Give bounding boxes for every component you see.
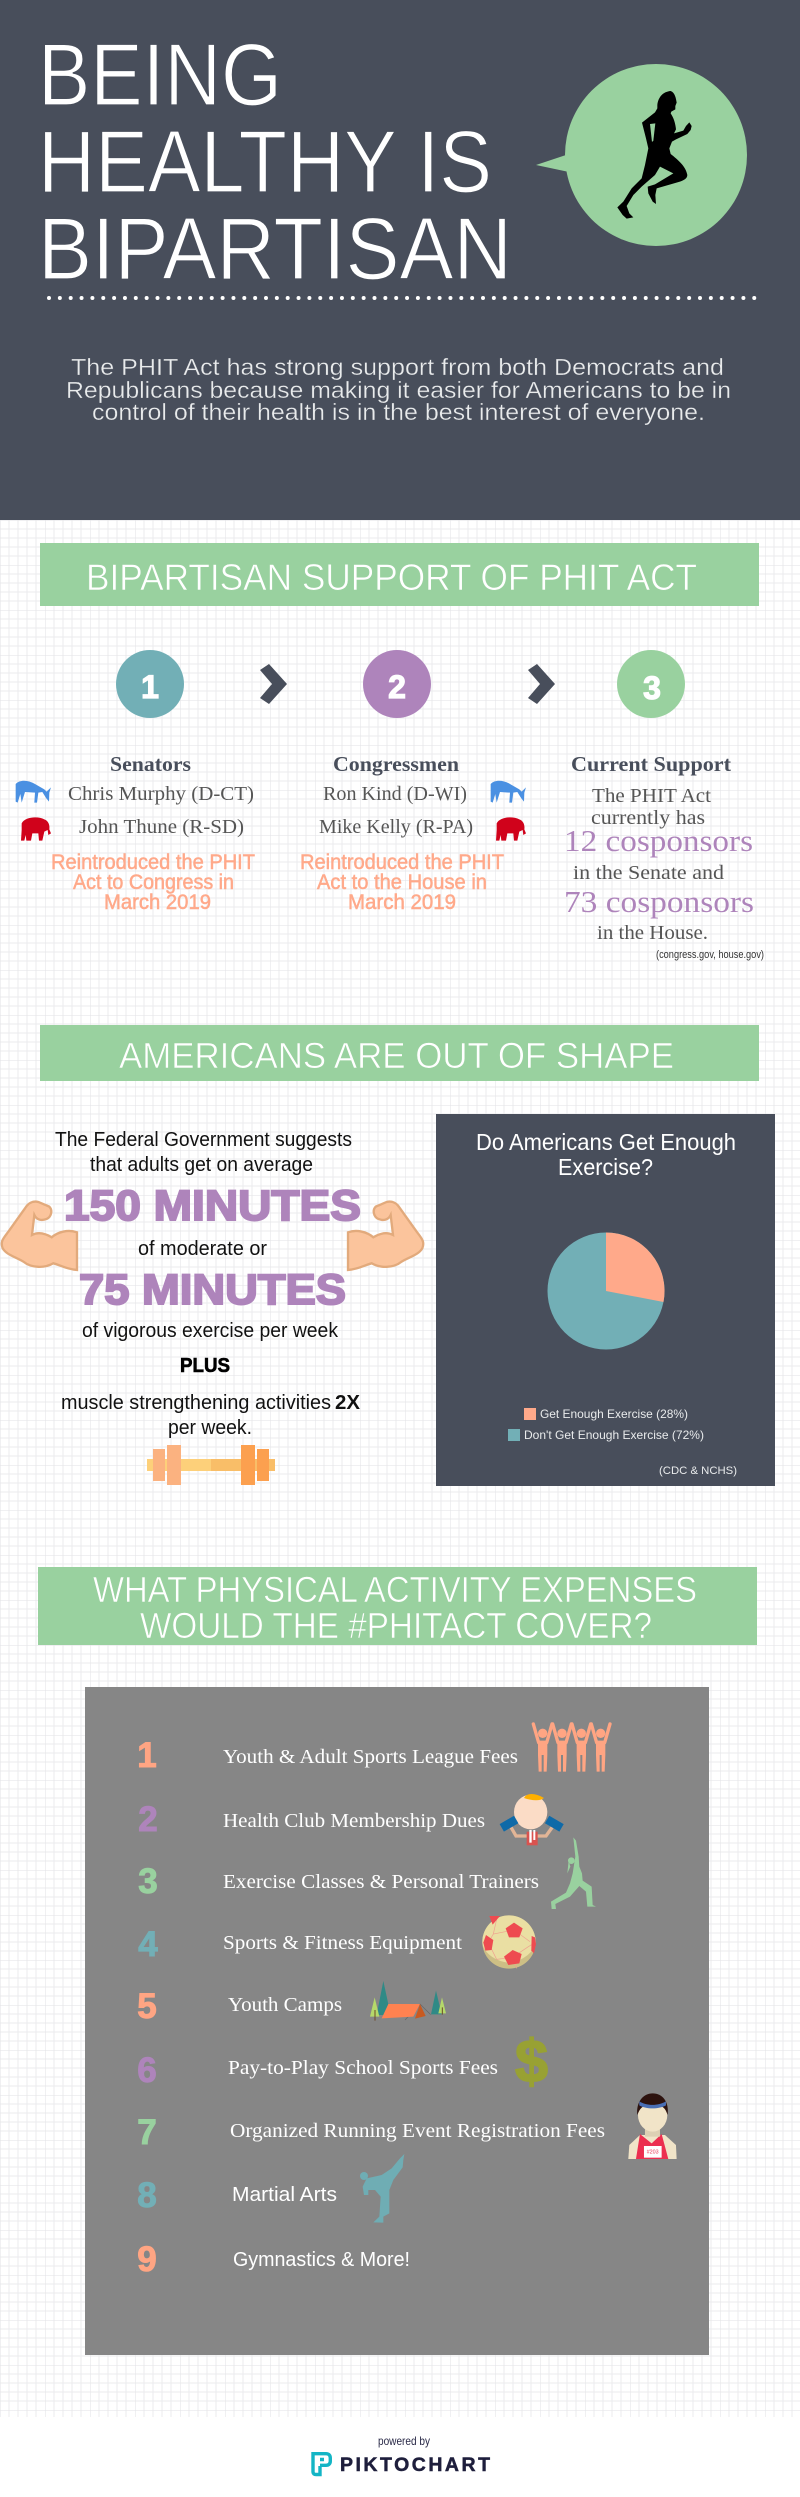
heading: physical activity expenses: WOULD THE #PHITACT COVER? (140, 1605, 652, 1646)
arrow: step 1 to 2 (260, 664, 287, 704)
stat: 75 minutes: 75 MINUTES (79, 1266, 346, 1314)
icon: republican elephant (21, 817, 51, 841)
title (38, 25, 512, 298)
icon: dumbbell (147, 1445, 275, 1485)
step 2 badge (363, 650, 431, 718)
heading: bipartisan support: BIPARTISAN SUPPORT OF PHIT ACT (86, 556, 697, 598)
icon: runner with race bib (628, 2093, 677, 2159)
intro text: control of their health is in the best interest of everyone. (92, 399, 705, 425)
panel: senators: Senators (110, 752, 191, 776)
step 1 badge (116, 650, 184, 718)
panel: congressmen: Congressmen (333, 752, 459, 776)
panel: current support: currently has (591, 807, 705, 829)
senators note: March 2019 (104, 891, 211, 914)
panel: senators: Chris Murphy (D-CT) (68, 783, 254, 805)
panel: exercise guidance: muscle strengthening activities (61, 1392, 331, 1414)
congressmen note: March 2019 (348, 891, 456, 914)
panel: senators (16, 752, 255, 914)
footer: powered by piktochart: PIKTOCHART (340, 2454, 490, 2476)
heading: physical activity expenses: WHAT PHYSICAL ACTIVITY EXPENSES (93, 1569, 697, 1610)
footer: powered by piktochart: powered by (378, 2434, 430, 2448)
panel: current support: in the House. (597, 922, 708, 944)
list numbers: 9 (137, 2240, 157, 2279)
panel: header (0, 0, 800, 520)
icon: republican elephant (496, 817, 526, 841)
step 3 badge: 3 (643, 670, 661, 706)
title: BIPARTISAN (38, 199, 512, 298)
list numbers: 4 (138, 1925, 158, 1964)
icon: soccer ball (482, 1915, 536, 1969)
title: BEING (38, 25, 282, 124)
list labels: Pay-to-Play School Sports Fees (228, 2057, 498, 2079)
heading: bipartisan support (40, 543, 759, 606)
heading: out of shape: AMERICANS ARE OUT OF SHAPE (119, 1035, 674, 1076)
congressmen note: Act to the House in (317, 871, 487, 894)
list numbers: 2 (138, 1800, 158, 1839)
senators note (51, 851, 255, 914)
list labels: Youth & Adult Sports League Fees (223, 1746, 518, 1768)
heading: out of shape (40, 1025, 759, 1081)
list labels: Sports & Fitness Equipment (223, 1932, 462, 1954)
heading: physical activity expenses (38, 1567, 757, 1646)
icon: speech bubble with runner (536, 64, 747, 246)
stat: house cosponsors: 73 cosponsors (564, 884, 754, 919)
chart title: Do Americans Get Enough (476, 1129, 736, 1155)
list labels: Gymnastics & More! (233, 2249, 410, 2271)
stat: 150 minutes: 150 MINUTES (64, 1182, 361, 1230)
intro text: Republicans because making it easier for Americans to be in (66, 377, 731, 403)
list numbers: 8 (137, 2176, 157, 2215)
panel: exercise guidance: The Federal Government suggests (55, 1129, 352, 1151)
icon: runner with race bib: #203 (647, 2150, 659, 2156)
list numbers: 3 (138, 1862, 158, 1901)
panel: exercise guidance: per week. (168, 1417, 252, 1439)
icon: left flexed arm (2, 1202, 77, 1270)
list numbers: 7 (137, 2113, 157, 2152)
panel: current support (564, 752, 764, 961)
list numbers (137, 1736, 158, 2279)
arrow: step 2 to 3 (528, 664, 555, 704)
panel: congressmen (300, 752, 526, 914)
source note: (CDC & NCHS) (659, 1465, 737, 1477)
panel: pie chart (436, 1114, 775, 1486)
list numbers: 5 (137, 1987, 157, 2026)
chart title (476, 1129, 736, 1180)
source note: (congress.gov, house.gov) (656, 949, 764, 961)
icon: group of people cheering (533, 1724, 610, 1772)
list labels: Martial Arts (232, 2184, 337, 2206)
title: HEALTHY IS (38, 112, 492, 211)
senators note: Act to Congress in (73, 871, 234, 894)
list labels (223, 1746, 605, 2271)
step 3 badge (617, 650, 685, 718)
panel: current support: The PHIT Act (592, 785, 711, 807)
stat: senate cosponsors: 12 cosponsors (564, 823, 753, 858)
step 2 badge: 2 (388, 669, 406, 705)
legend: Get Enough Exercise (28%) (540, 1407, 688, 1421)
footer: powered by piktochart (0, 2417, 800, 2497)
list labels: Organized Running Event Registration Fees (230, 2120, 605, 2142)
panel: senators: John Thune (R-SD) (79, 816, 244, 838)
list numbers: 6 (137, 2051, 157, 2090)
legend: Don't Get Enough Exercise (72%) (524, 1428, 704, 1442)
panel: current support: Current Support (571, 752, 731, 776)
pie chart (548, 1232, 665, 1350)
panel: exercise guidance: 2X (335, 1392, 361, 1414)
chart title: Exercise? (558, 1154, 653, 1180)
icon: dollar sign: $ (515, 2028, 548, 2095)
list labels: Exercise Classes & Personal Trainers (223, 1871, 539, 1893)
panel: exercise guidance: of vigorous exercise per week (82, 1320, 339, 1342)
panel: congressmen: Ron Kind (D-WI) (323, 783, 467, 805)
panel: congressmen: Mike Kelly (R-PA) (319, 816, 473, 838)
icon: right flexed arm (348, 1202, 423, 1270)
congressmen note: Reintroduced the PHIT (300, 851, 504, 874)
legend (508, 1407, 704, 1442)
icon: democrat donkey (16, 781, 51, 803)
list labels: Health Club Membership Dues (223, 1810, 485, 1832)
intro text (66, 354, 731, 425)
panel: expense list (85, 1687, 709, 2355)
icon: martial arts kick (360, 2154, 404, 2223)
congressmen note (300, 851, 504, 914)
intro text: The PHIT Act has strong support from both Democrats and (71, 354, 724, 380)
icon: democrat donkey (491, 781, 526, 803)
icon: camping tent (370, 1981, 446, 2021)
step 1 badge: 1 (141, 669, 159, 705)
page background grid (0, 520, 800, 2417)
panel: exercise guidance: PLUS (180, 1355, 230, 1377)
senators note: Reintroduced the PHIT (51, 851, 255, 874)
list labels: Youth Camps (228, 1994, 342, 2016)
dotted divider (49, 296, 764, 300)
icon: man lifting dumbbells (500, 1794, 564, 1845)
icon: piktochart logo (313, 2454, 330, 2474)
list numbers: 1 (137, 1736, 157, 1775)
icon: yoga pose (551, 1837, 596, 1909)
panel: exercise guidance: of moderate or (138, 1238, 267, 1260)
panel: current support: in the Senate and (573, 862, 724, 884)
panel: exercise guidance: that adults get on average (90, 1154, 313, 1176)
panel: exercise guidance (55, 1129, 361, 1439)
